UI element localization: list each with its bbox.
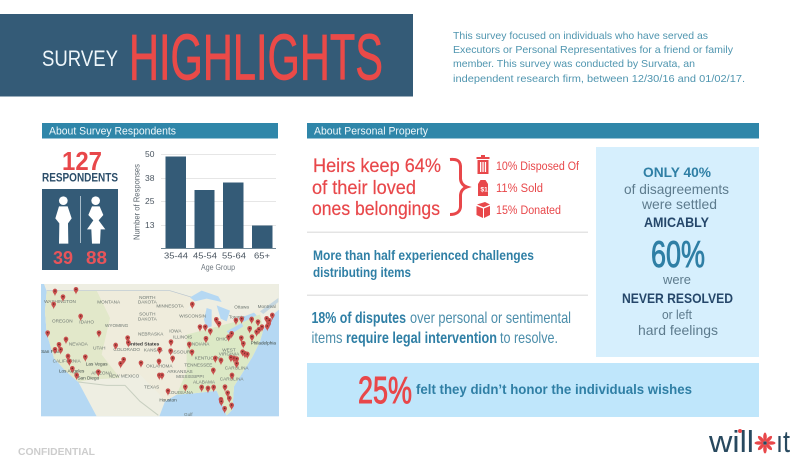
title banner: [0, 14, 413, 96]
statement: challenges distributing items: [313, 247, 534, 280]
map of respondents: [41, 284, 279, 417]
bar chart: responses by age group: 38: [145, 173, 155, 183]
bar chart: responses by age group: 45-54: [193, 250, 217, 260]
text: donated: 15% Donated: [496, 205, 561, 217]
survey description text: independent research firm, between 12/30/16 and 01/02/17.: [453, 73, 745, 85]
map of respondents: Los Angeles: [59, 369, 85, 374]
map labels: ILLINOIS: [173, 334, 192, 339]
respondents total: RESPONDENTS: [42, 170, 118, 184]
map labels: NEBRASKA: [138, 332, 164, 337]
brace: [450, 159, 467, 214]
map of respondents: Las Vegas: [86, 361, 108, 366]
survey description text: Executors or Personal Representatives for a friend or family: [453, 44, 734, 56]
logo: willit: will: [708, 424, 754, 459]
map labels: WEST: [222, 347, 236, 352]
map labels: DAKOTA: [138, 300, 158, 305]
bar chart: responses by age group: 35-44: [164, 250, 188, 260]
icon: price tag: $1: [480, 186, 488, 194]
bar chart: responses by age group: Number of Responses: [132, 164, 142, 240]
panel: disagreement outcomes: were settled: [641, 196, 717, 212]
icon: man: [55, 196, 72, 244]
map of respondents: San Diego: [77, 376, 100, 381]
survey description text: This survey focused on individuals who have served as: [453, 30, 708, 42]
panel heading: about personal property: [307, 123, 759, 138]
icon: price tag: [478, 180, 488, 196]
heirs keep 64% statement: Heirs keep 64%: [313, 155, 441, 177]
panel: disagreement outcomes: were: [662, 272, 691, 287]
panel heading: about survey respondents: [42, 123, 278, 138]
survey description text: [453, 30, 745, 85]
map labels: MINNESOTA: [156, 303, 185, 308]
map of respondents: United States: [127, 342, 159, 348]
map labels: KENTUCKY: [195, 356, 220, 361]
map labels: Gulf: [184, 412, 193, 417]
statement: 18% of disputes: require legal intervention: [346, 330, 497, 347]
panel: disagreement outcomes: 60%: [651, 234, 705, 275]
map of respondents: Houston: [159, 398, 177, 403]
map labels: NORTH: [139, 295, 156, 300]
map labels: MISSISSIPPI: [176, 374, 204, 379]
panel: disagreement outcomes: NEVER RESOLVED: [622, 290, 733, 306]
map labels: LOUISIANA: [168, 390, 194, 395]
map labels: NEVADA: [69, 342, 89, 347]
map labels: WISCONSIN: [179, 313, 206, 318]
statement: 18% of disputes: to resolve.: [500, 330, 558, 347]
map labels: NEW MEXICO: [109, 374, 140, 379]
bar chart: responses by age group: 50: [145, 149, 155, 159]
bar chart: responses by age group: 65+: [254, 250, 270, 260]
gender breakdown panel: [42, 189, 118, 270]
map labels: Ottawa: [234, 305, 249, 310]
statement: challenges distributing items: More than half experienced challenges: [313, 247, 534, 263]
map labels: WASHINGTON: [44, 299, 76, 304]
statement: challenges distributing items: distributing items: [313, 264, 411, 280]
map labels: [44, 295, 276, 417]
map labels: Toronto: [229, 315, 245, 320]
text: sold: 11% Sold: [496, 183, 543, 195]
heirs keep 64% statement: ones belongings: [312, 198, 440, 220]
callout: 25% wishes: [307, 363, 759, 417]
map labels: TEXAS: [144, 385, 159, 390]
count: women: 88: [86, 248, 107, 268]
map labels: MONTANA: [97, 299, 121, 304]
map labels: SOUTH: [139, 312, 155, 317]
statement: 18% of disputes: over personal or sentimental: [410, 310, 571, 327]
statement: 18% of disputes: [312, 310, 571, 347]
map labels: IOWA: [169, 328, 182, 333]
map labels: TENNESSEE: [184, 363, 212, 368]
map labels: CAROLINA: [225, 366, 249, 371]
title banner: HIGHLIGHTS: [129, 20, 383, 94]
title banner: SURVEY: [42, 46, 118, 71]
statement: 18% of disputes: 18% of disputes: [312, 310, 406, 327]
map labels: OKLAHOMA: [146, 363, 173, 368]
map labels: CAROLINA: [220, 377, 244, 382]
heirs keep 64% statement: [312, 155, 441, 220]
map labels: ALABAMA: [193, 379, 216, 384]
location pins: [45, 287, 275, 414]
logo: willit: [708, 424, 790, 459]
map of respondents: Philadelphia: [251, 340, 276, 345]
bar chart: responses by age group: 25: [145, 196, 155, 206]
icon: donation box: [476, 202, 490, 218]
panel: disagreement outcomes: of disagreements: [624, 181, 729, 197]
map labels: IDAHO: [79, 320, 94, 325]
map labels: ARKANSAS: [167, 369, 193, 374]
map labels: CALIFORNIA: [53, 359, 82, 364]
statement: 18% of disputes: items: [312, 330, 342, 347]
icon: woman: [87, 196, 105, 244]
confidential note: CONFIDENTIAL: [18, 446, 96, 458]
text: disposed of: 10% Disposed Of: [496, 161, 580, 173]
map labels: Montreal: [258, 304, 276, 309]
count: men: 39: [53, 248, 73, 268]
map labels: UTAH: [93, 345, 105, 350]
map labels: KANSAS: [144, 348, 163, 353]
respondents total: [42, 146, 118, 184]
callout: 25% wishes: 25%: [358, 370, 412, 412]
respondents total: 127: [62, 146, 102, 176]
map labels: COLORADO: [113, 347, 140, 352]
icon: trash can: [476, 155, 490, 174]
panel: disagreement outcomes: AMICABLY: [644, 214, 710, 230]
bar chart: responses by age group: 55-64: [222, 250, 246, 260]
panel: disagreement outcomes: [596, 147, 759, 357]
callout: 25% wishes: felt they didn’t honor the individuals wishes: [416, 381, 692, 397]
map labels: WYOMING: [105, 323, 129, 328]
map labels: OHIO: [216, 336, 228, 341]
panel: disagreement outcomes: hard feelings: [638, 322, 718, 338]
bar chart: responses by age group: [132, 149, 276, 272]
bar chart: responses by age group: Age Group: [201, 263, 235, 272]
panel heading: about survey respondents: About Survey Respondents: [49, 126, 176, 138]
map land: [44, 284, 279, 416]
map labels: VIRGINIA: [219, 351, 240, 356]
logo: willit: ıt: [776, 424, 790, 459]
panel: disagreement outcomes: or left: [662, 307, 692, 322]
panel heading: about personal property: About Personal Property: [314, 126, 428, 138]
heirs keep 64% statement: of their loved: [312, 177, 416, 199]
bar chart: responses by age group: 13: [145, 220, 155, 230]
panel: disagreement outcomes: ONLY 40%: [643, 164, 712, 180]
survey description text: member. This survey was conducted by Survata, an: [453, 58, 695, 70]
map of respondents: San Fran: [41, 349, 61, 354]
map labels: INDIANA: [191, 341, 210, 346]
great lakes: [190, 291, 222, 302]
map labels: ARIZONA: [91, 370, 113, 375]
map labels: DAKOTA: [138, 316, 158, 321]
map labels: OREGON: [52, 318, 73, 323]
map labels: MISSOURI: [168, 350, 192, 355]
